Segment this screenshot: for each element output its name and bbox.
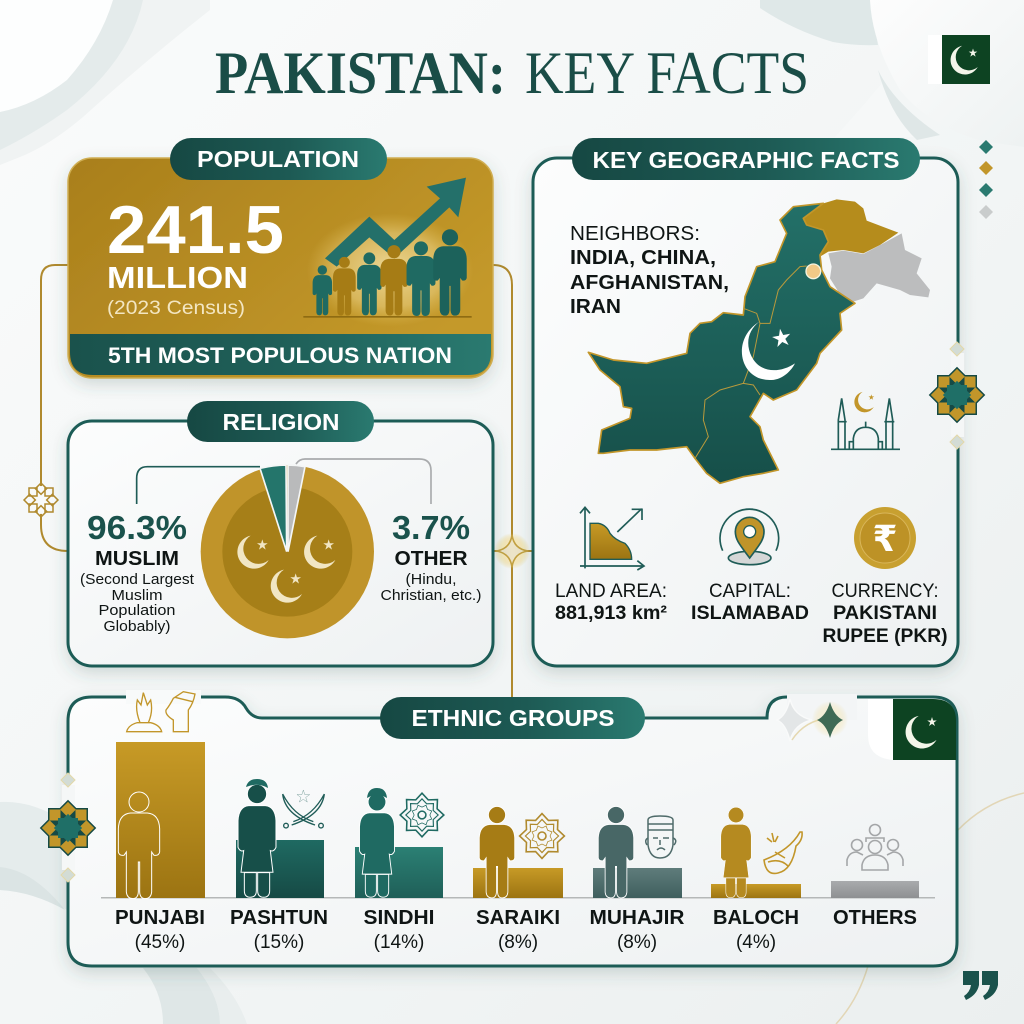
neighbors text: [570, 223, 729, 318]
group: Baloch: BALOCH: [713, 907, 799, 929]
population figure: 241.5: [107, 192, 284, 268]
population figure: MILLION: [107, 260, 248, 295]
muslim share: Globably): [104, 619, 170, 635]
other share: [380, 509, 482, 604]
bar: Pashtun: [236, 840, 324, 898]
other share: Christian, etc.): [380, 588, 482, 604]
group: Baloch: [711, 807, 802, 953]
group: Muhajir: [590, 806, 685, 953]
muslim share: 96.3%: [87, 509, 187, 546]
geographic heading pill: [572, 138, 920, 180]
icon: left ornament: [40, 773, 96, 882]
group: Sindhi: (14%): [374, 932, 424, 953]
figure: Pashtun: [238, 779, 276, 897]
group: Pashtun: PASHTUN: [230, 907, 328, 929]
panel: ethnic groups: [68, 690, 957, 966]
muslim share: Muslim: [112, 588, 162, 604]
icon: group of people: [847, 824, 903, 870]
icon: flag in panel corner: [868, 699, 956, 760]
group: Muhajir: (8%): [617, 932, 657, 953]
population figure: [107, 192, 284, 319]
group: Punjabi: PUNJABI: [115, 907, 205, 929]
currency: [822, 507, 948, 647]
panel: geographic facts: [533, 138, 958, 666]
icon: Baloch instrument: [764, 832, 802, 873]
group: Saraiki: SARAIKI: [476, 907, 560, 929]
connector lines: [41, 265, 533, 697]
group: Pashtun: [230, 779, 328, 953]
bar: Muhajir: [593, 868, 682, 898]
neighbors text: IRAN: [570, 296, 621, 318]
population band: 5TH MOST POPULOUS NATION: [108, 343, 452, 368]
other share: 3.7%: [392, 509, 470, 546]
religion heading pill: [187, 401, 374, 442]
land area: [555, 507, 667, 624]
bar: Punjabi: [116, 742, 205, 898]
bar: Saraiki: [473, 868, 563, 898]
icon: Punjabi flame and drum: [127, 692, 195, 732]
neighbors text: NEIGHBORS:: [570, 223, 700, 245]
bar: Others: [831, 881, 919, 898]
currency: CURRENCY:: [832, 581, 938, 602]
figure: Saraiki: [479, 806, 515, 898]
religion heading pill: RELIGION: [222, 409, 340, 435]
title: KEY FACTS: [525, 40, 809, 106]
icon: sparkles: [777, 699, 848, 741]
icon: gold sparkle junction: [494, 533, 530, 569]
icon: location pin: [720, 509, 779, 565]
group: Sindhi: [355, 788, 444, 953]
bar: Baloch: [711, 884, 801, 898]
population heading pill: POPULATION: [197, 146, 359, 172]
capital: [691, 509, 809, 624]
figure: Muhajir: [598, 806, 634, 898]
decorative diamonds: [979, 140, 993, 219]
pie chart: [137, 459, 431, 638]
muslim share: [80, 509, 194, 635]
icon: Muhajir face with cap: [646, 816, 676, 858]
figure: Punjabi: [118, 792, 160, 899]
title: PAKISTAN:: [215, 40, 506, 106]
map of Pakistan: [588, 199, 930, 483]
icon: closing quote mark: [963, 971, 998, 1000]
title: [215, 40, 809, 106]
muslim share: Population: [98, 603, 176, 619]
population figure: (2023 Census): [107, 298, 245, 319]
group: Sindhi: SINDHI: [364, 907, 434, 929]
figure: Sindhi: [360, 788, 394, 897]
land area: 881,913 km²: [555, 603, 667, 624]
muslim share: MUSLIM: [95, 548, 179, 570]
other share: OTHER: [394, 548, 468, 570]
chart baseline: [101, 897, 935, 898]
population band: [70, 334, 491, 375]
icon: rupee coin: ₹: [872, 519, 898, 560]
currency: PAKISTANI: [833, 603, 937, 624]
land area: LAND AREA:: [555, 581, 667, 602]
group: Saraiki: [473, 806, 564, 953]
group: Muhajir: MUHAJIR: [590, 907, 685, 929]
group: Baloch: (4%): [736, 932, 776, 953]
panel: population: [68, 138, 493, 378]
icon: Sindhi ornament: [400, 793, 444, 837]
bar: Sindhi: [355, 847, 443, 898]
icon: growing population with arrow: [303, 178, 473, 327]
group: Saraiki: (8%): [498, 932, 538, 953]
other share: (Hindu,: [406, 572, 456, 588]
figure: Baloch: [721, 807, 751, 898]
icon: land area: [580, 507, 644, 570]
icon: Pakistan flag: [928, 35, 990, 84]
geographic heading pill: KEY GEOGRAPHIC FACTS: [592, 147, 900, 173]
icon: gold line ornament: [24, 483, 58, 517]
currency: RUPEE (PKR): [822, 626, 948, 647]
neighbors text: AFGHANISTAN,: [570, 272, 729, 294]
capital: CAPITAL:: [709, 581, 791, 602]
neighbors text: INDIA, CHINA,: [570, 247, 716, 269]
ethnic heading pill: ETHNIC GROUPS: [412, 705, 614, 731]
icon: right ornament: [929, 342, 985, 449]
capital: ISLAMABAD: [691, 603, 809, 624]
group: Others: OTHERS: [833, 907, 917, 929]
icon: crossed swords and star: [283, 790, 324, 828]
panel: religion: [68, 401, 493, 666]
ethnic heading pill: [380, 697, 645, 739]
group: Pashtun: (15%): [254, 932, 304, 953]
icon: Saraiki ornament: [520, 814, 564, 858]
group: Punjabi: [115, 692, 205, 953]
population heading pill: [170, 138, 387, 180]
muslim share: (Second Largest: [80, 572, 194, 588]
icon: mosque: [831, 392, 900, 449]
group: Punjabi: (45%): [135, 932, 185, 953]
group: Others: [831, 824, 919, 929]
